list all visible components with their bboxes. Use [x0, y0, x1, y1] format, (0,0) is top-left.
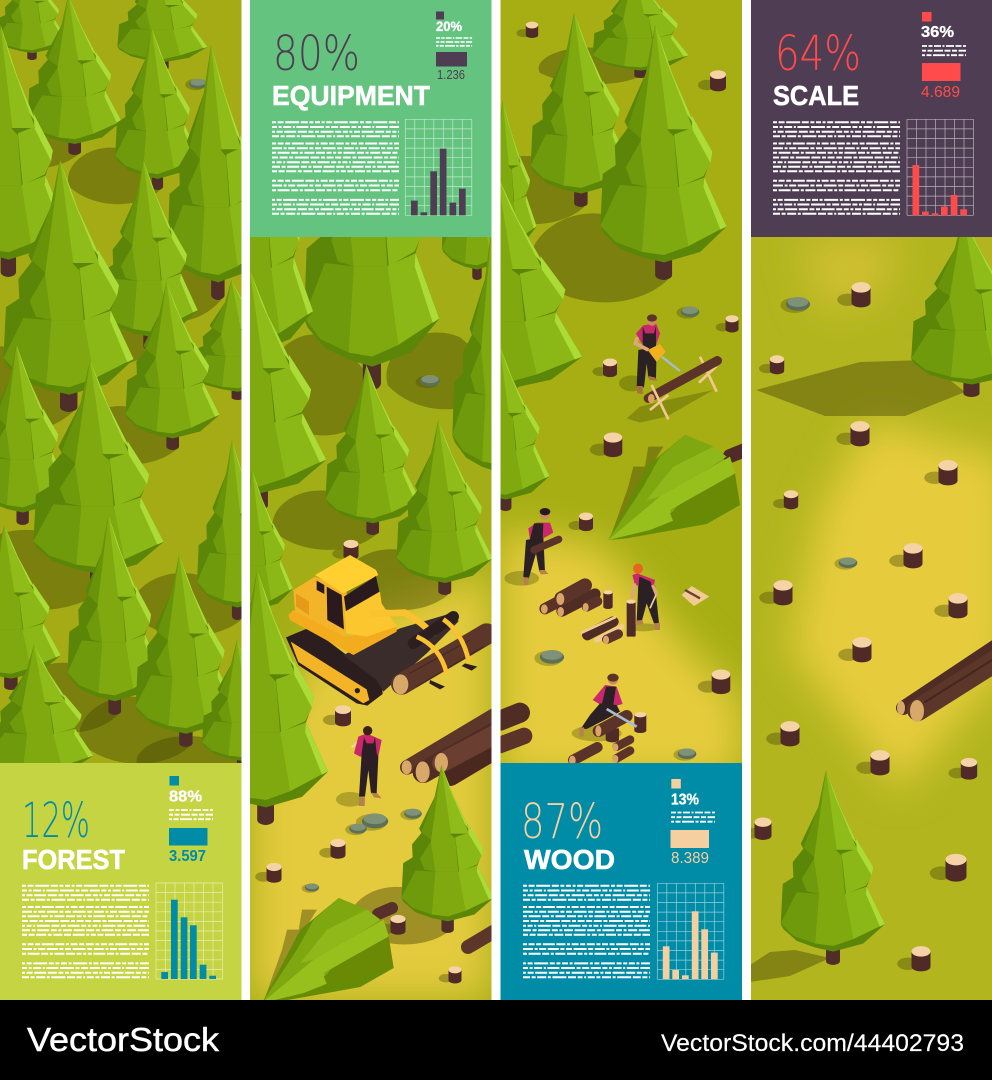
big number 80%: 80% [273, 26, 360, 82]
key stat 13%: 13% [671, 792, 699, 808]
brand wordmark: VectorStock [27, 1021, 220, 1058]
text block [523, 886, 650, 977]
conifer trees [781, 215, 992, 965]
heading WOOD: WOOD [524, 844, 615, 875]
worker with chainsaw at sawhorse [619, 314, 717, 423]
text block [773, 122, 900, 214]
panel: equipment info [250, 0, 492, 237]
icon: stumps [255, 540, 462, 983]
panel: wood info [500, 763, 742, 1000]
image url: VectorStock.com/44402793 [661, 1030, 964, 1057]
big number 12%: 12% [22, 793, 90, 849]
tree shadow [756, 360, 965, 416]
stumps and rocks [516, 22, 738, 761]
worker with axe on shoulder [336, 726, 382, 807]
fallen tree [262, 898, 394, 1003]
heading EQUIPMENT: EQUIPMENT [272, 80, 430, 111]
conifer trees front [250, 572, 492, 933]
big number 87%: 87% [521, 794, 603, 850]
key stat 36%: 4.689 [921, 84, 960, 101]
bar chart: wood [657, 883, 724, 979]
bar chart: forest [156, 883, 222, 979]
panel: forest scene [0, 0, 242, 763]
log stub behind fallen tree [730, 450, 745, 456]
workers chopping, sawing and log piles [500, 508, 709, 765]
conifer trees behind [250, 237, 492, 607]
conifer trees, forest panel [0, 0, 242, 763]
fallen tree [608, 435, 740, 540]
excavator with log [286, 555, 487, 706]
panel: scale info [751, 0, 992, 237]
key stat 20% [436, 12, 472, 82]
key stat 88% [169, 776, 213, 865]
panel: wood scene [500, 0, 742, 763]
footer bar [0, 1000, 992, 1080]
key stat 88%: 3.597 [169, 848, 206, 865]
bar chart: scale [907, 119, 974, 215]
icon: rock [185, 79, 207, 90]
conifer trees [500, 0, 726, 511]
text block [22, 886, 149, 977]
rocks [302, 809, 422, 893]
log pile [402, 710, 503, 783]
key stat 20%: 20% [436, 18, 463, 34]
key stat 20%: 1.236 [437, 67, 465, 82]
panel: scale scene [742, 215, 992, 1000]
text block [272, 122, 399, 214]
logs bottom right [378, 908, 500, 947]
key stat 13% [670, 779, 715, 867]
key stat 13%: 8.389 [671, 850, 709, 867]
icon: stumps [742, 282, 977, 971]
key stat 36% [921, 12, 966, 101]
icon: rocks [780, 297, 857, 570]
felled logs [897, 640, 992, 722]
big number 64%: 64% [775, 26, 861, 82]
heading FOREST: FOREST [22, 844, 125, 875]
key stat 36%: 36% [921, 24, 954, 41]
icon: rock [416, 375, 440, 388]
key stat 88%: 88% [169, 788, 202, 806]
panel: equipment scene [250, 237, 492, 1000]
heading SCALE: SCALE [773, 80, 859, 111]
bar chart: equipment [405, 119, 472, 215]
panel: forest info [0, 763, 242, 1000]
